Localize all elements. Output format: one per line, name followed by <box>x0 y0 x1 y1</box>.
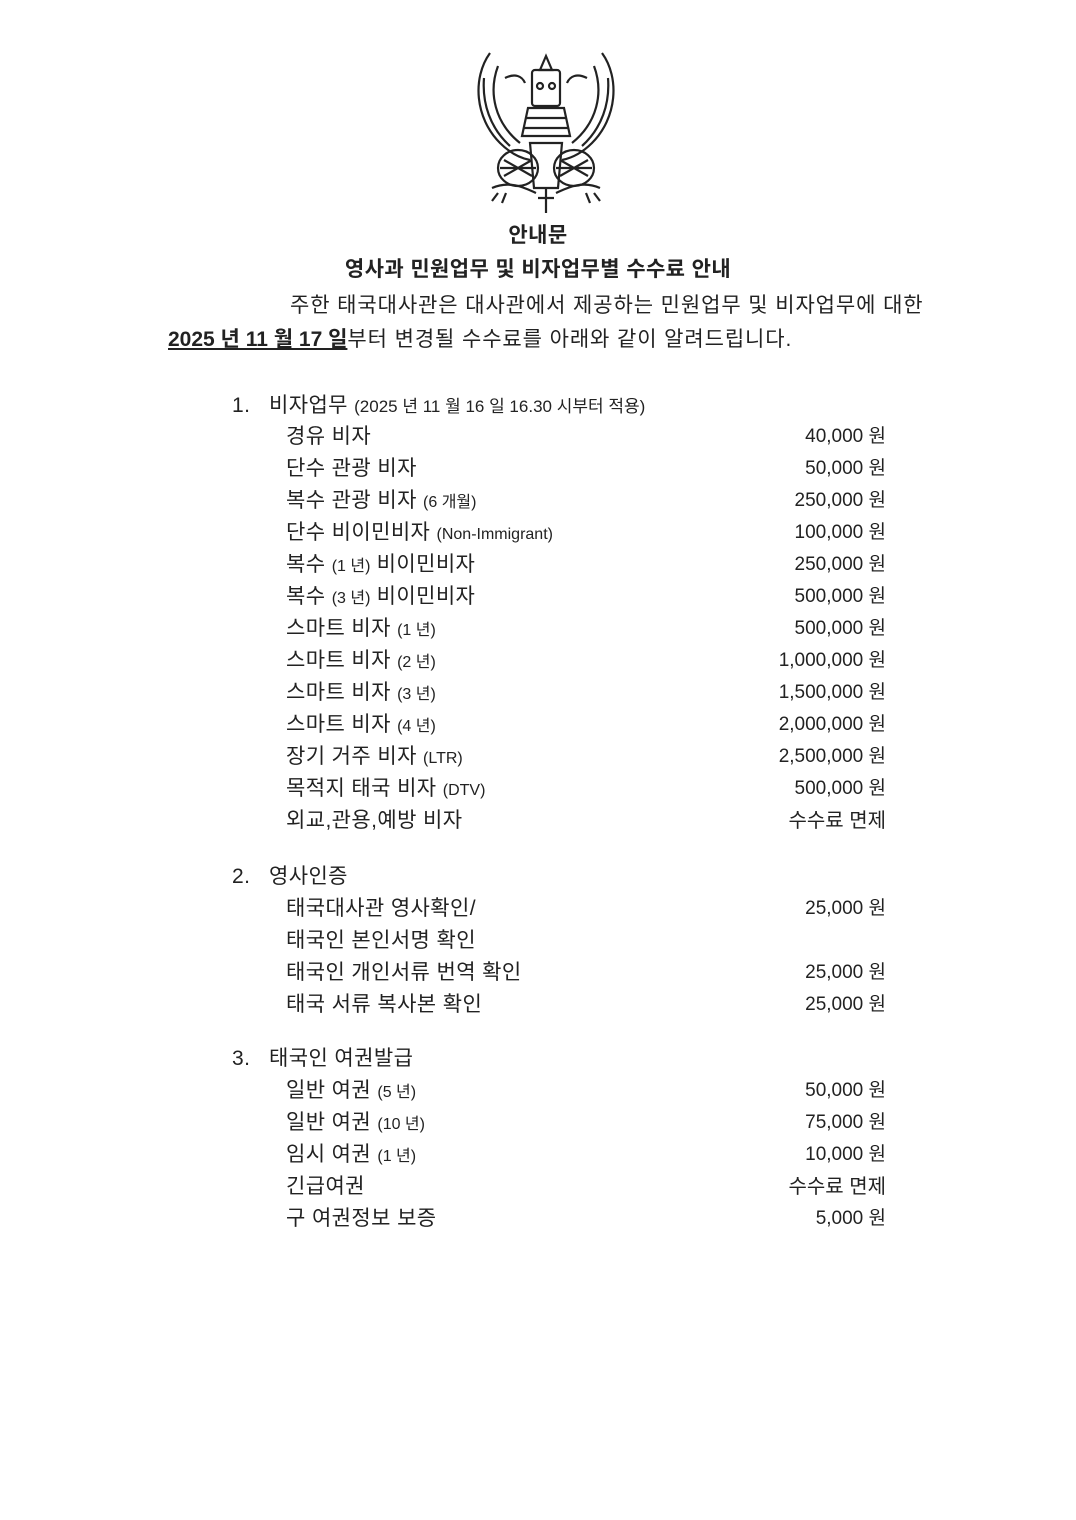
text: 250,000 원 <box>795 490 886 511</box>
icon: garuda emblem <box>477 52 615 213</box>
intro text: 2025 년 11 월 17 일부터 변경될 수수료를 아래와 같이 알려드립니다. <box>168 328 792 351</box>
text: 10,000 원 <box>805 1144 886 1165</box>
text: 50,000 원 <box>805 458 886 479</box>
text: 수수료 면제 <box>788 810 886 832</box>
text: 일반 여권 (5 년) <box>286 1079 416 1102</box>
text: 1,000,000 원 <box>779 650 886 671</box>
text: 25,000 원 <box>805 994 886 1015</box>
text: 복수 (3 년) 비이민비자 <box>286 585 475 608</box>
text: 2,000,000 원 <box>779 714 886 735</box>
text: 장기 거주 비자 (LTR) <box>286 745 463 768</box>
text: 40,000 원 <box>805 426 886 447</box>
text: 500,000 원 <box>795 618 886 639</box>
text: 100,000 원 <box>795 522 886 543</box>
subheading: 영사과 민원업무 및 비자업무별 수수료 안내 <box>345 258 731 281</box>
text: 25,000 원 <box>805 962 886 983</box>
text: 50,000 원 <box>805 1080 886 1101</box>
text: 75,000 원 <box>805 1112 886 1133</box>
section 2: consular certification: 2. 영사인증 <box>232 865 348 888</box>
text: 복수 관광 비자 (6 개월) <box>286 489 476 512</box>
text: 250,000 원 <box>795 554 886 575</box>
text: 단수 비이민비자 (Non-Immigrant) <box>286 521 553 544</box>
text: 25,000 원 <box>805 898 886 919</box>
text: 단수 관광 비자 <box>286 457 417 480</box>
text: 복수 (1 년) 비이민비자 <box>286 553 475 576</box>
text: 긴급여권 <box>286 1175 365 1198</box>
text: 500,000 원 <box>795 778 886 799</box>
text: 스마트 비자 (4 년) <box>286 713 436 736</box>
section 1: visa: 1. 비자업무 (2025 년 11 월 16 일 16.30 시부터 적용) <box>232 394 645 417</box>
text: 수수료 면제 <box>788 1176 886 1198</box>
text: 구 여권정보 보증 <box>286 1207 437 1230</box>
heading: 안내문 <box>508 224 568 247</box>
text: 목적지 태국 비자 (DTV) <box>286 777 485 800</box>
text: 경유 비자 <box>286 425 371 448</box>
text: 1,500,000 원 <box>779 682 886 703</box>
text: 500,000 원 <box>795 586 886 607</box>
text: 외교,관용,예방 비자 <box>286 809 462 832</box>
text: 스마트 비자 (3 년) <box>286 681 436 704</box>
text: 스마트 비자 (1 년) <box>286 617 436 640</box>
text: 일반 여권 (10 년) <box>286 1111 425 1134</box>
text: 스마트 비자 (2 년) <box>286 649 436 672</box>
text: 2,500,000 원 <box>779 746 886 767</box>
text: 5,000 원 <box>816 1208 886 1229</box>
text: 태국인 개인서류 번역 확인 <box>286 961 522 984</box>
intro text: 주한 태국대사관은 대사관에서 제공하는 민원업무 및 비자업무에 대한 <box>290 294 924 317</box>
text: 태국대사관 영사확인/ <box>286 897 476 920</box>
text: 태국인 본인서명 확인 <box>286 929 476 952</box>
section 3: passport: 3. 태국인 여권발급 <box>232 1047 413 1070</box>
intro text <box>168 294 924 351</box>
text: 태국 서류 복사본 확인 <box>286 993 482 1016</box>
text: 임시 여권 (1 년) <box>286 1143 416 1166</box>
